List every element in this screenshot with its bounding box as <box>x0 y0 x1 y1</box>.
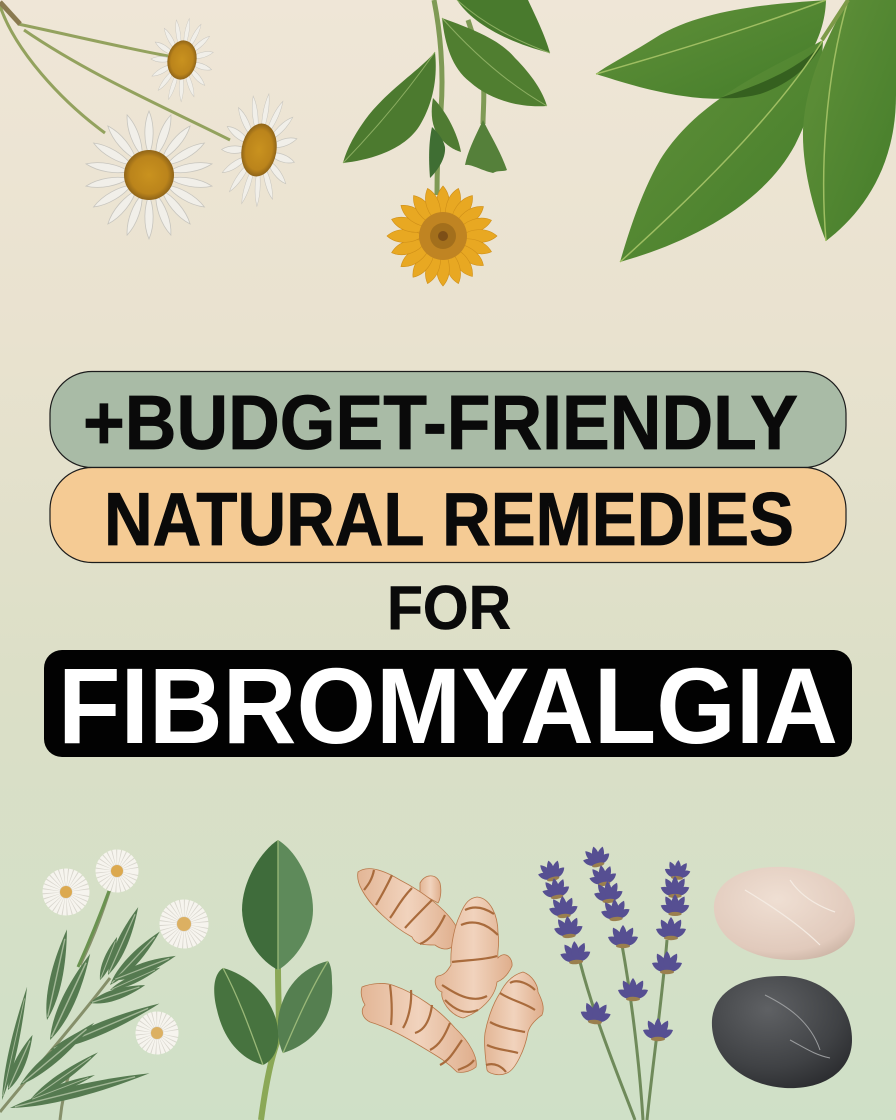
heading line 2: NATURAL REMEDIES <box>104 477 794 561</box>
icon: lavender sprigs <box>534 843 693 1120</box>
icon: arnica sprig top center <box>343 0 550 286</box>
title pill: budget-friendly <box>50 372 846 468</box>
icon: green leaf plant <box>214 840 332 1120</box>
title pill: natural remedies <box>50 468 846 562</box>
icon: white flowers <box>43 850 208 1054</box>
icon: dark stone <box>712 976 852 1088</box>
icon: large green leaves top right <box>596 0 896 262</box>
heading line 4: FIBROMYALGIA <box>58 645 838 766</box>
icon: turmeric roots <box>358 869 543 1075</box>
icon: small top daisy <box>144 13 220 107</box>
heading line 1: +BUDGET-FRIENDLY <box>83 380 798 466</box>
icon: yellow flower <box>387 186 497 286</box>
title banner: fibromyalgia <box>44 645 852 766</box>
icon: chamomile sprig top left <box>0 2 306 239</box>
icon: rosemary with white flowers bottom left <box>0 850 208 1120</box>
icon: light stone <box>714 867 855 960</box>
heading: for: FOR <box>387 574 511 643</box>
icon: large daisy <box>85 111 213 239</box>
icon: right daisy <box>212 87 306 212</box>
